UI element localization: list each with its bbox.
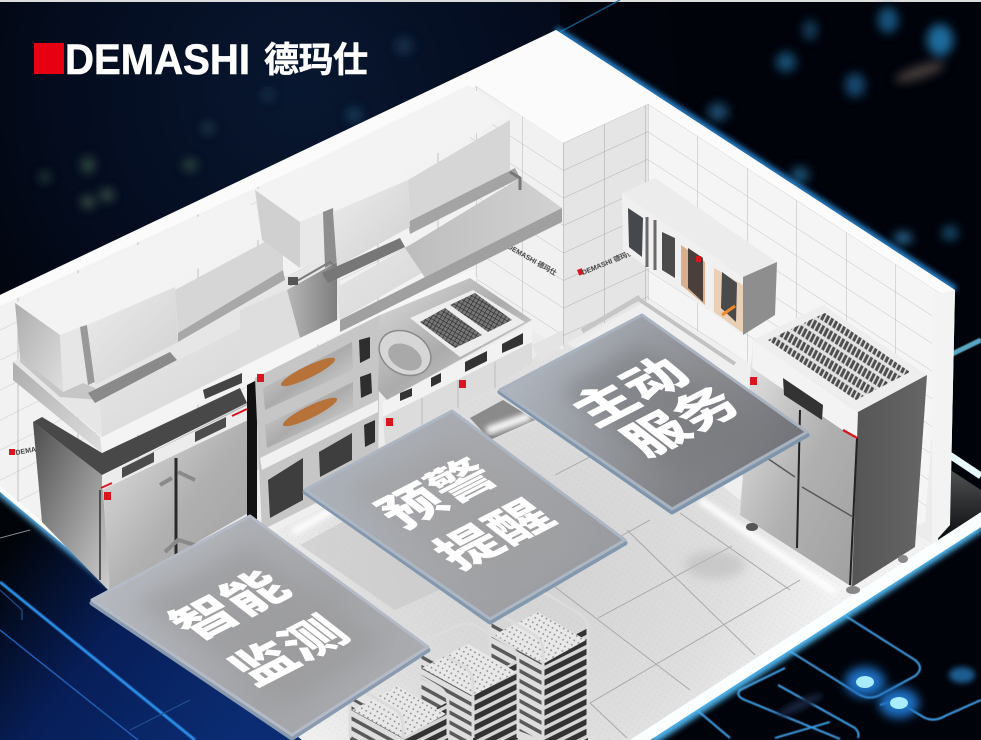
panel: intelligent monitoring <box>92 516 428 738</box>
heading: 主动: 主动 <box>559 350 703 435</box>
duct box right <box>255 85 510 222</box>
heading: 提醒: 提醒 <box>423 493 567 578</box>
deck oven with proofer <box>247 315 380 538</box>
left canopy <box>13 250 340 437</box>
right outer slab <box>938 465 981 540</box>
proofer windows <box>268 458 303 518</box>
brand wordmark: DEMASHI <box>65 36 250 84</box>
bread <box>278 353 340 431</box>
left wall tiles <box>0 82 470 585</box>
led floor strips <box>470 400 535 440</box>
fryer station <box>371 278 532 445</box>
icon: red square <box>34 43 64 74</box>
panel: early warning <box>305 411 625 622</box>
wall shelf <box>405 178 562 285</box>
logo: DEMASHI <box>34 36 368 84</box>
wall top <box>0 30 955 306</box>
circuit: lower left blue area <box>0 490 302 740</box>
back duct face right <box>408 120 510 225</box>
heading: 智能: 智能 <box>159 564 303 649</box>
white lip <box>240 270 477 378</box>
right wall tiles <box>648 104 943 540</box>
wall logo: left wall: DEMASHI <box>15 444 48 457</box>
wall cabinet <box>622 178 777 335</box>
wall logo: back wall: DEMASHI 德玛仕 <box>506 242 558 277</box>
floor <box>115 340 981 740</box>
brand Chinese name: 德玛仕 <box>264 41 368 80</box>
heading: 预警: 预警 <box>366 452 510 537</box>
refrigerator cabinet left <box>33 403 250 592</box>
range hood <box>13 85 562 475</box>
control panels <box>359 337 370 363</box>
heading: 服务: 服务 <box>610 380 754 465</box>
refrigerator right <box>740 305 927 594</box>
floor tile lines <box>555 400 800 738</box>
dark worktop <box>33 388 247 475</box>
back duct face left <box>175 232 283 335</box>
door front <box>740 340 858 587</box>
grille top <box>753 305 927 412</box>
baking trolley rear <box>490 592 588 740</box>
floor front edge <box>630 512 981 740</box>
circuit: lower right glowing traces <box>685 615 981 739</box>
heading: 监测: 监测 <box>218 609 362 694</box>
back wall tiles left of column <box>470 82 563 350</box>
panel: proactive service <box>500 315 807 512</box>
baking trolley front <box>350 666 448 740</box>
right canopy face <box>337 197 500 320</box>
baking trolley middle <box>420 624 518 740</box>
wall rail <box>582 297 735 364</box>
wall logo: column: DEMASHI 德玛仕 <box>580 248 635 277</box>
column front <box>563 104 648 345</box>
dark side <box>852 375 927 587</box>
duct box left <box>15 197 283 335</box>
